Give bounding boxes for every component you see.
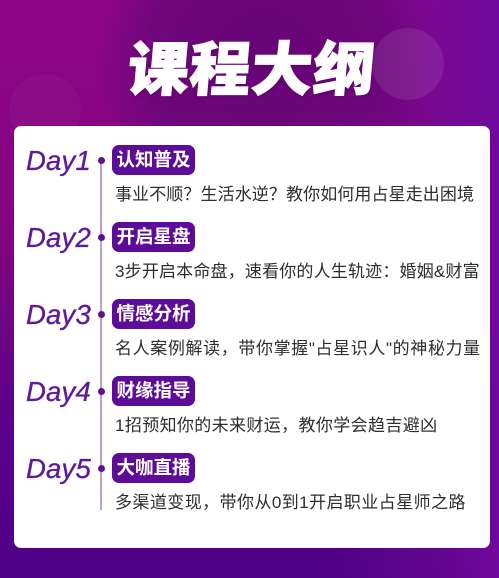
day 1 row: 认知普及 [116,149,190,170]
day 5 row: 大咖直播 [116,457,190,478]
day 2 row: Day2 [26,222,91,253]
panel: course outline card [14,126,490,548]
day 3 row: 名人案例解读，带你掌握"占星识人"的神秘力量 [115,339,481,358]
day 4 row [26,376,437,435]
day 4 row: 1招预知你的未来财运，教你学会趋吉避凶 [115,416,437,435]
day 4 row: Day4 [26,376,91,407]
day 2 row [26,222,480,281]
day 3 row [26,299,481,358]
day 5 row: 多渠道变现，带你从0到1开启职业占星师之路 [115,493,466,512]
day 2 row: 3步开启本命盘，速看你的人生轨迹：婚姻&财富 [115,262,480,281]
timeline line [100,160,102,510]
day 1 row: Day1 [26,145,91,176]
day 1 row [26,145,474,204]
day 5 row: Day5 [26,453,91,484]
day 2 row: 开启星盘 [116,226,190,247]
day 4 row: 财缘指导 [116,380,190,401]
day 3 row: Day3 [26,299,91,330]
day 5 row [26,453,466,512]
day 3 row: 情感分析 [116,303,190,324]
day 1 row: 事业不顺？生活水逆？教你如何用占星走出困境 [115,185,474,204]
title: 课程大纲 [125,38,378,102]
